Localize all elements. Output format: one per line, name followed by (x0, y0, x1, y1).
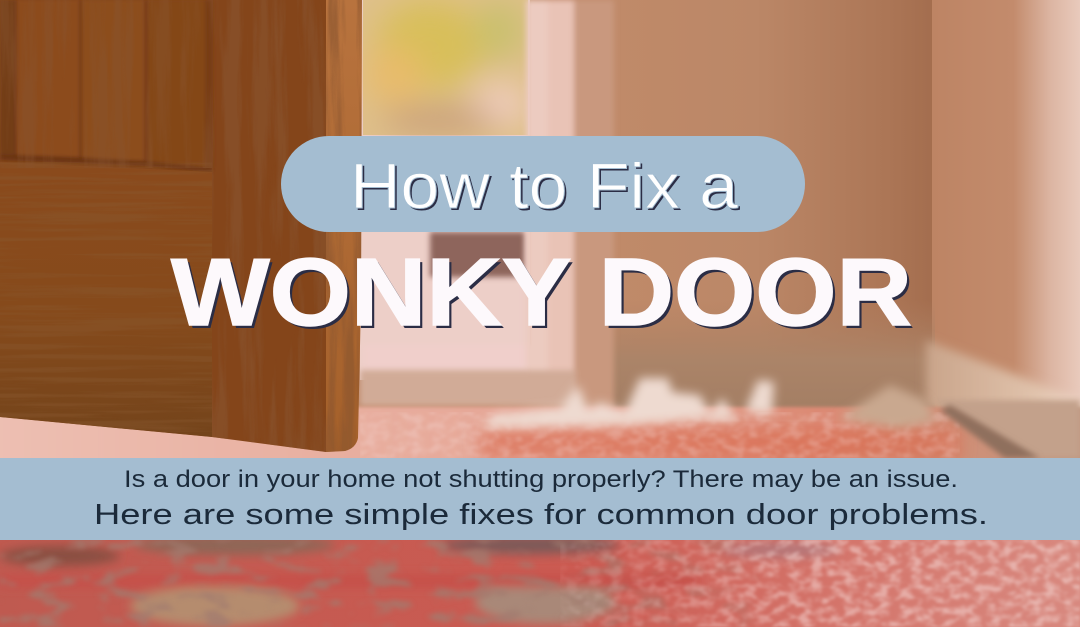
window opening with garden view (360, 0, 543, 380)
rug tassels (480, 378, 935, 428)
title line: WONKY DOOR: WONKY DOOR (171, 239, 912, 346)
door (0, 0, 366, 460)
back wall (610, 0, 935, 420)
rug pattern blobs (0, 535, 840, 626)
intro band (0, 458, 1080, 540)
foreground blurred rug (0, 535, 1080, 627)
intro line 2: Here are some simple fixes for common door problems. (94, 499, 988, 531)
door face (0, 0, 326, 460)
lower door rail (0, 162, 212, 437)
window frame (360, 0, 614, 420)
right side wall (932, 0, 1080, 470)
title line: How to Fix a: How to Fix a (352, 152, 740, 224)
intro line 1: Is a door in your home not shutting properly? There may be an issue. (124, 466, 958, 493)
vertical wood grain (0, 0, 212, 168)
title line: WONKY DOOR: WONKY DOOR (174, 242, 915, 349)
door panels (0, 0, 213, 172)
door edge (326, 0, 362, 452)
title line: How to Fix a: How to Fix a (350, 150, 738, 222)
horizontal wood grain (24, 162, 212, 172)
lower wall shading (575, 300, 935, 420)
right wall skirting (926, 340, 1080, 470)
background room photo (0, 0, 1080, 477)
title pill (281, 136, 805, 232)
floor and far rug (0, 398, 1080, 458)
